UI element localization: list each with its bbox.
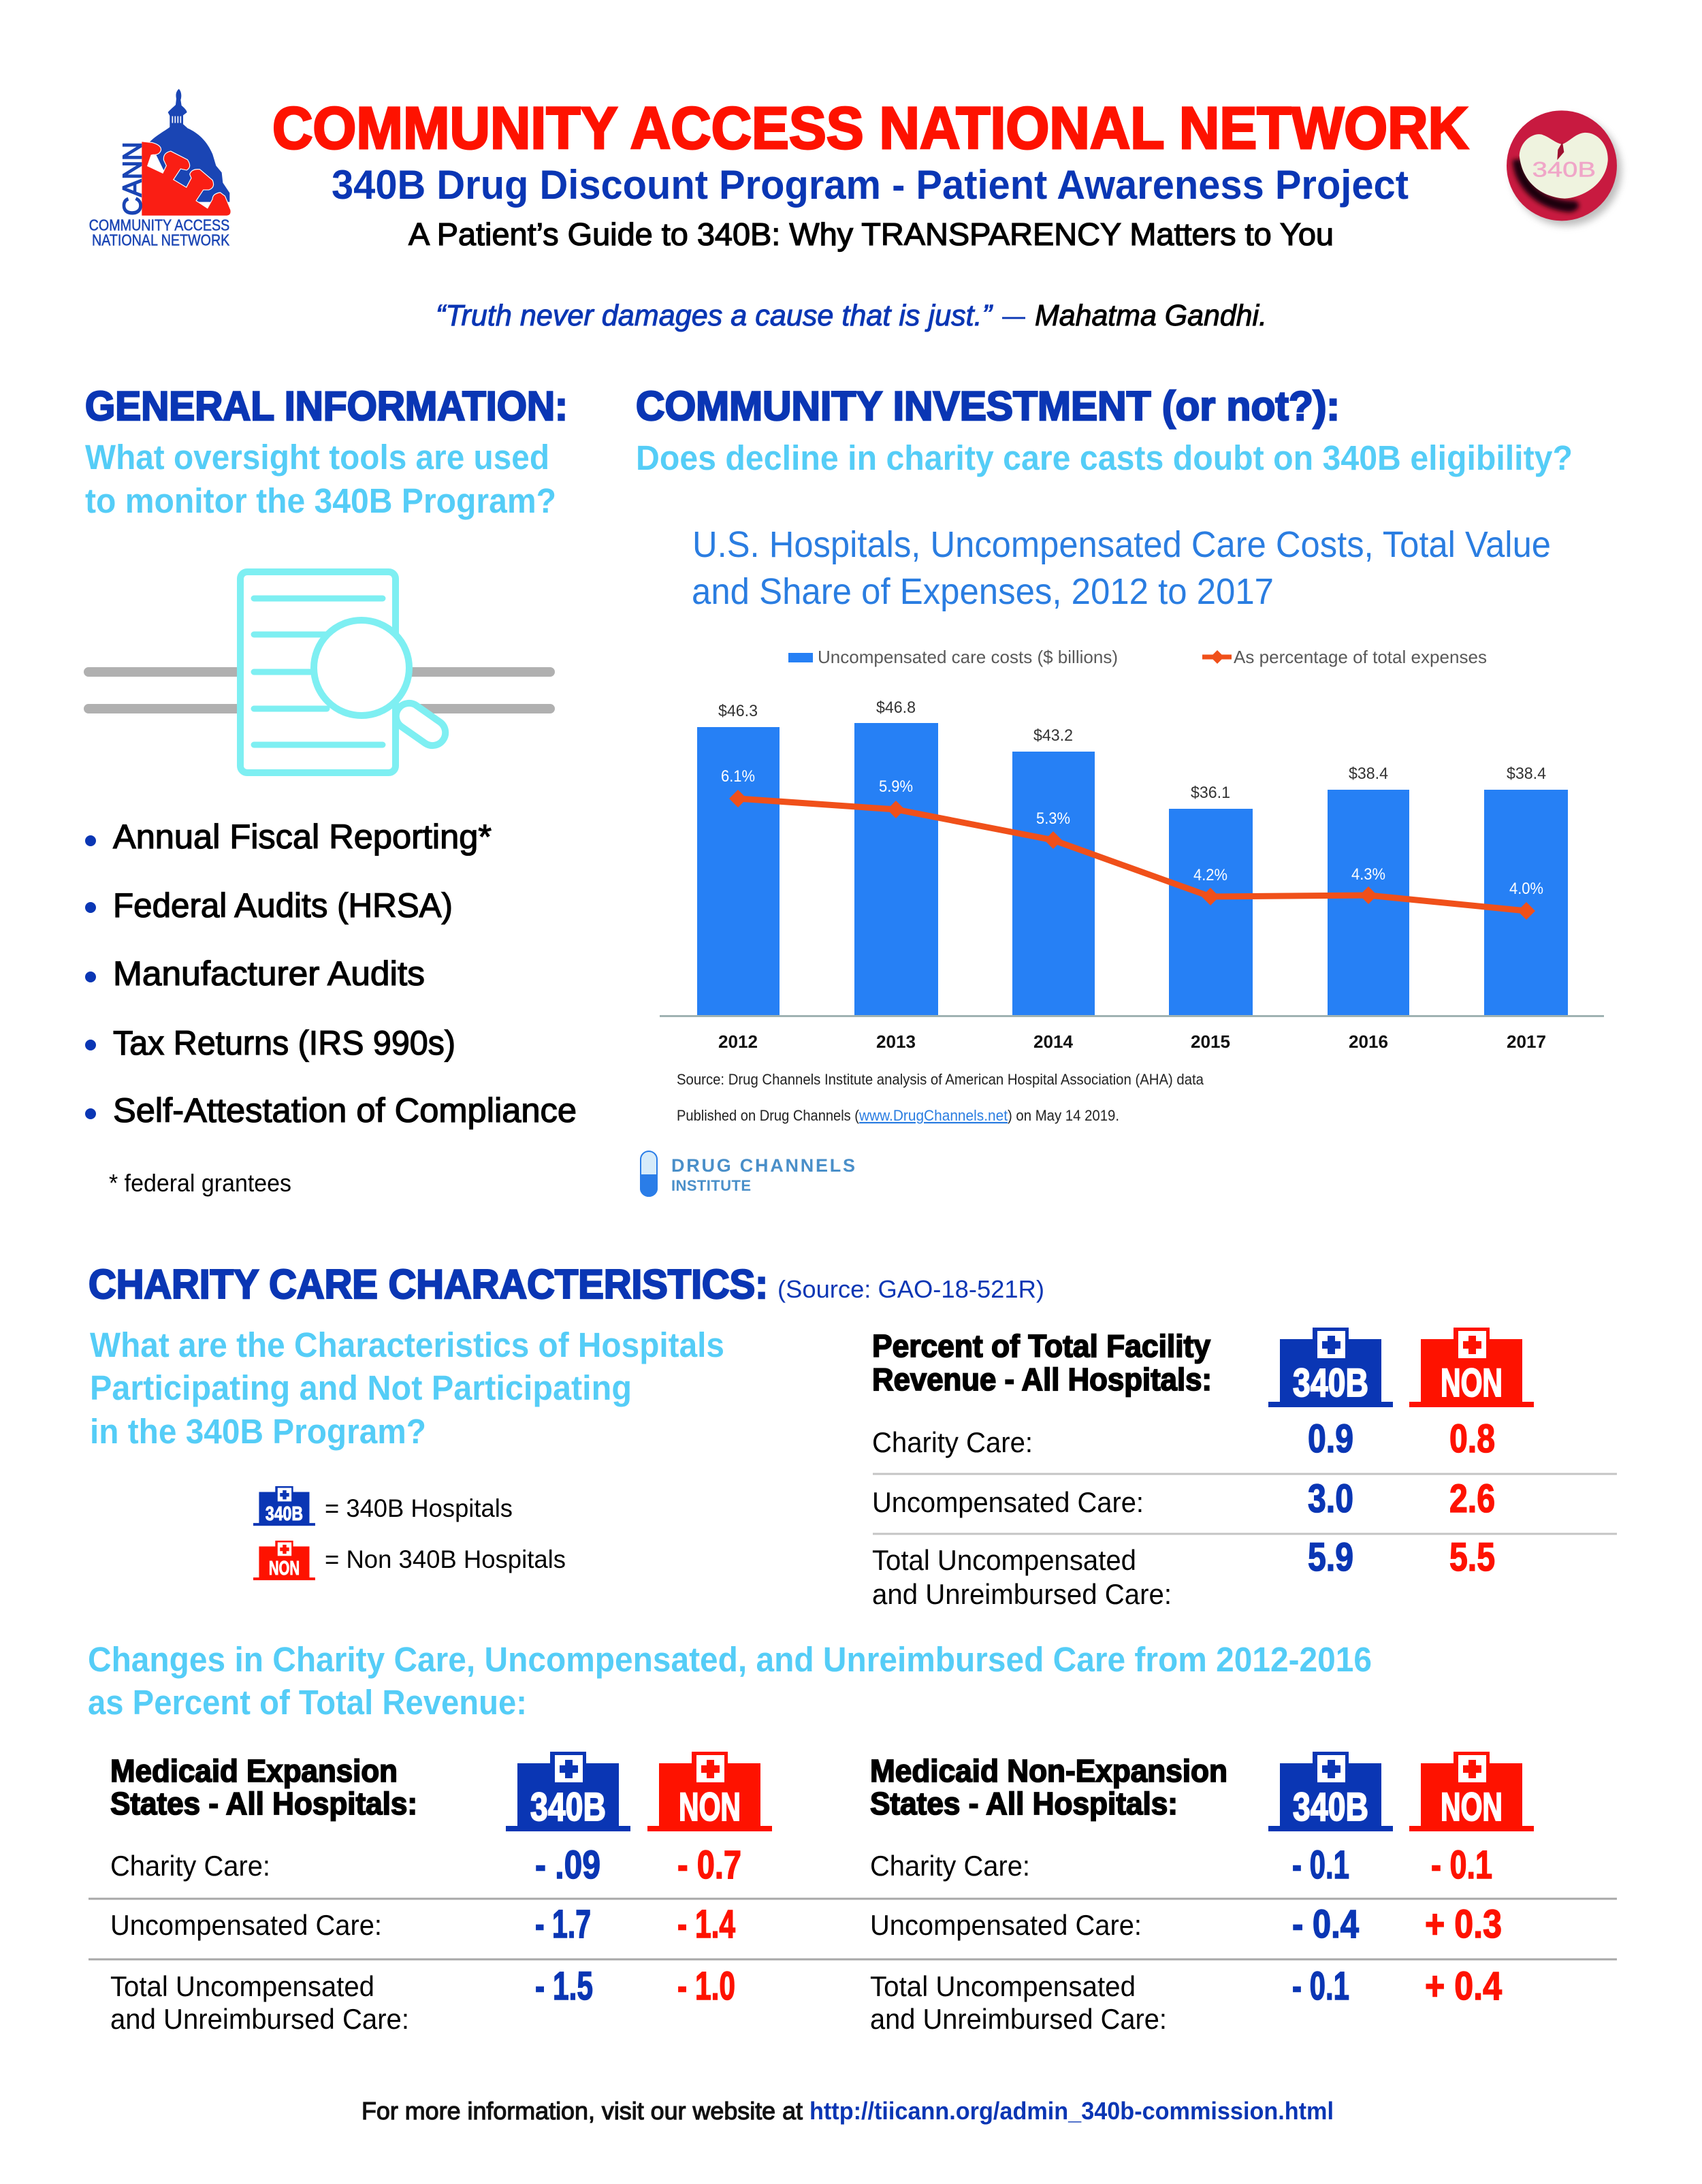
row: charity care — [872, 1417, 1495, 1461]
row: uncompensated care: - 1.4 — [677, 1902, 735, 1946]
icon: non 340B hospital — [647, 1752, 772, 1831]
chart legend: As percentage of total expenses — [1234, 647, 1487, 667]
footer: website link — [362, 2097, 1334, 2125]
bullet list: oversight tools — [85, 818, 577, 1129]
table heading — [870, 1753, 1227, 1821]
bullet list: oversight tools: Federal Audits (HRSA) — [113, 886, 453, 925]
row: total uncompensated and unreimbursed care — [870, 1964, 1502, 2035]
subtitle: 340B Drug Discount Program - Patient Awareness Project — [332, 162, 1409, 208]
bar chart: 2015 — [1191, 1031, 1230, 1052]
table heading — [110, 1753, 417, 1821]
row: total uncompensated and unreimbursed care: and Unreimbursed Care: — [110, 2003, 409, 2035]
question: hospital characteristics: Participating and Not Participating — [90, 1368, 632, 1407]
table heading: Medicaid Non-Expansion — [870, 1753, 1227, 1788]
bar chart: 6.1% — [721, 767, 755, 786]
row: total uncompensated and unreimbursed care: - 1.0 — [677, 1964, 735, 2008]
row: total uncompensated and unreimbursed care — [110, 1964, 735, 2035]
bullet list: oversight tools: Tax Returns (IRS 990s) — [113, 1024, 455, 1062]
row: total uncompensated and unreimbursed care: - 0.1 — [1292, 1964, 1349, 2008]
icon: document under magnifying glass — [89, 572, 550, 773]
question: oversight tools: to monitor the 340B Program? — [85, 481, 556, 520]
row: total uncompensated and unreimbursed care: Total Uncompensated — [872, 1544, 1136, 1576]
question: oversight tools: What oversight tools are used — [85, 438, 549, 477]
icon: non 340B hospital: NON — [679, 1785, 741, 1829]
row: total uncompensated and unreimbursed care: and Unreimbursed Care: — [870, 2003, 1167, 2035]
bar chart: $46.3 — [718, 702, 758, 720]
bar chart: 4.0% — [1509, 880, 1543, 898]
row: uncompensated care: + 0.3 — [1425, 1902, 1502, 1946]
bar chart: $36.1 — [1191, 784, 1230, 802]
row: total uncompensated and unreimbursed care: Total Uncompensated — [870, 1970, 1136, 2002]
header logo: CANN capitol dome — [89, 89, 231, 249]
chart legend: Uncompensated care costs ($ billions) — [818, 647, 1118, 667]
bar chart — [660, 698, 1604, 1052]
logo: Drug Channels Institute: INSTITUTE — [671, 1177, 751, 1194]
chart source note: Source: Drug Channels Institute analysis of American Hospital Association (AHA) data — [677, 1071, 1204, 1088]
panel: community investment — [636, 383, 1604, 1197]
question: hospital characteristics — [90, 1326, 724, 1451]
source citation: (Source: GAO-18-521R) — [777, 1275, 1044, 1303]
bar chart: $38.4 — [1507, 765, 1546, 783]
row: charity care: - 0.7 — [677, 1843, 741, 1887]
chart source note: www.DrugChannels.net — [858, 1107, 1008, 1124]
row: charity care: 0.8 — [1449, 1417, 1495, 1461]
bullet list: oversight tools: Self-Attestation of Compliance — [113, 1091, 577, 1129]
heading: changes in charity care: as Percent of Total Revenue: — [88, 1683, 527, 1722]
bar chart: 4.3% — [1351, 865, 1385, 884]
row: uncompensated care: - 1.7 — [535, 1902, 591, 1946]
question: charity care decline: Does decline in charity care casts doubt on 340B eligibility? — [636, 438, 1573, 477]
table heading: States - All Hospitals: — [870, 1786, 1178, 1821]
bar chart: $46.8 — [876, 698, 916, 717]
row: charity care — [870, 1843, 1492, 1887]
footer: website link: http://tiicann.org/admin_340b-commission.html — [809, 2097, 1334, 2125]
footer: website link: For more information, visit our website at — [362, 2097, 803, 2125]
footnote: * federal grantees — [109, 1169, 291, 1197]
icon: 340B hospital — [1268, 1328, 1393, 1407]
row: uncompensated care: Uncompensated Care: — [872, 1486, 1144, 1518]
row: charity care: Charity Care: — [872, 1426, 1033, 1458]
quote: — — [1002, 299, 1025, 332]
icon: 340B hospital: 340B — [1293, 1785, 1368, 1829]
table heading: Revenue - All Hospitals: — [872, 1362, 1212, 1397]
row: charity care: Charity Care: — [110, 1850, 270, 1882]
row: charity care: 0.9 — [1308, 1417, 1353, 1461]
row: uncompensated care: Uncompensated Care: — [110, 1909, 382, 1941]
icon: 340B heart pill badge — [1507, 110, 1622, 226]
row: total uncompensated and unreimbursed care: - 1.5 — [535, 1964, 593, 2008]
bar chart: 5.3% — [1036, 809, 1070, 828]
row: total uncompensated and unreimbursed care — [872, 1535, 1495, 1610]
chart source note: Published on Drug Channels ( — [677, 1107, 860, 1124]
question: oversight tools — [85, 438, 556, 520]
bar chart: 5.9% — [879, 777, 913, 796]
bar chart: 2013 — [876, 1031, 916, 1052]
bullet list: oversight tools: Manufacturer Audits — [113, 954, 425, 993]
logo: Drug Channels Institute — [640, 1151, 855, 1197]
icon: 340B hospital: 340B — [1293, 1361, 1368, 1405]
table heading: States - All Hospitals: — [110, 1786, 417, 1821]
bar chart: 4.2% — [1193, 866, 1227, 884]
bar chart: $38.4 — [1349, 765, 1388, 783]
row: uncompensated care — [110, 1902, 735, 1946]
header logo: CANN capitol dome: COMMUNITY ACCESS — [89, 216, 229, 234]
heading: community investment: COMMUNITY INVESTMENT (or not?): — [636, 383, 1340, 429]
legend: 340B hospitals: 340B — [266, 1503, 303, 1525]
icon: non 340B hospital: NON — [1441, 1361, 1503, 1405]
quote: Mahatma Gandhi. — [1035, 299, 1267, 332]
icon: non 340B hospital: NON — [1441, 1785, 1503, 1829]
chart title: and Share of Expenses, 2012 to 2017 — [692, 571, 1274, 612]
table heading: Percent of Total Facility — [872, 1328, 1210, 1364]
table: medicaid non-expansion states — [870, 1752, 1534, 2035]
icon: 340B heart pill badge: 340B — [1532, 157, 1596, 181]
icon: 340B hospital — [1268, 1752, 1393, 1831]
bar chart: 2017 — [1507, 1031, 1546, 1052]
legend: 340B hospitals: = 340B Hospitals — [325, 1494, 513, 1522]
question: hospital characteristics: in the 340B Program? — [90, 1412, 426, 1451]
row: uncompensated care: - 0.4 — [1292, 1902, 1359, 1946]
heading: changes in charity care — [88, 1640, 1372, 1722]
header logo: CANN capitol dome: NATIONAL NETWORK — [92, 231, 229, 249]
bar chart: $43.2 — [1033, 726, 1073, 745]
row: charity care: - 0.1 — [1431, 1843, 1492, 1887]
heading: charity care characteristics: CHARITY CARE CHARACTERISTICS: — [89, 1262, 768, 1307]
row: total uncompensated and unreimbursed care: 5.5 — [1449, 1535, 1495, 1579]
main title: COMMUNITY ACCESS NATIONAL NETWORK — [272, 95, 1468, 161]
row: uncompensated care: Uncompensated Care: — [870, 1909, 1142, 1941]
header logo: CANN capitol dome: CANN — [117, 142, 147, 216]
panel: charity care characteristics — [89, 1262, 1044, 1580]
row: charity care: Charity Care: — [870, 1850, 1030, 1882]
legend: non 340B hospitals: NON — [269, 1558, 300, 1579]
table: medicaid expansion states — [110, 1752, 772, 2035]
heading: changes in charity care: Changes in Charity Care, Uncompensated, and Unreimbursed Care from 2012-2016 — [88, 1640, 1372, 1679]
row: charity care: - .09 — [535, 1843, 600, 1887]
icon: non 340B hospital — [1409, 1752, 1534, 1831]
row: charity care — [110, 1843, 741, 1887]
chart source note — [677, 1071, 1204, 1124]
question: hospital characteristics: What are the Characteristics of Hospitals — [90, 1326, 724, 1364]
row: uncompensated care: 3.0 — [1308, 1477, 1353, 1521]
row: uncompensated care — [872, 1477, 1495, 1521]
table: percent of total facility revenue — [872, 1328, 1617, 1610]
row: total uncompensated and unreimbursed care: and Unreimbursed Care: — [872, 1578, 1172, 1610]
guide tagline: A Patient’s Guide to 340B: Why TRANSPARENCY Matters to You — [408, 216, 1334, 252]
bullet list: oversight tools: Annual Fiscal Reporting* — [113, 818, 492, 856]
row: charity care: - 0.1 — [1292, 1843, 1349, 1887]
chart title: U.S. Hospitals, Uncompensated Care Costs, Total Value — [692, 524, 1551, 565]
legend: non 340B hospitals — [253, 1541, 566, 1580]
legend: non 340B hospitals: = Non 340B Hospitals — [325, 1545, 566, 1573]
bar chart: 2014 — [1033, 1031, 1074, 1052]
row: uncompensated care: 2.6 — [1449, 1477, 1495, 1521]
legend: 340B hospitals — [253, 1486, 513, 1526]
row: total uncompensated and unreimbursed care: 5.9 — [1308, 1535, 1353, 1579]
bar chart: 2016 — [1349, 1031, 1388, 1052]
icon: 340B hospital: 340B — [530, 1785, 606, 1829]
quote: “Truth never damages a cause that is just.” — [436, 299, 993, 332]
table heading: Medicaid Expansion — [110, 1753, 398, 1788]
row: total uncompensated and unreimbursed care: Total Uncompensated — [110, 1970, 374, 2002]
chart source note: ) on May 14 2019. — [1008, 1107, 1119, 1124]
icon: non 340B hospital — [1409, 1328, 1534, 1407]
row: uncompensated care — [870, 1902, 1502, 1946]
heading: general information: GENERAL INFORMATION: — [85, 383, 568, 429]
quote — [436, 299, 1267, 332]
icon: 340B hospital — [506, 1752, 630, 1831]
logo: Drug Channels Institute: DRUG CHANNELS — [671, 1155, 855, 1176]
row: total uncompensated and unreimbursed care: + 0.4 — [1425, 1964, 1502, 2008]
panel: general information — [85, 383, 577, 1197]
chart title — [692, 524, 1551, 612]
chart legend — [788, 647, 1487, 667]
bar chart: 2012 — [718, 1031, 758, 1052]
table heading — [872, 1328, 1212, 1397]
